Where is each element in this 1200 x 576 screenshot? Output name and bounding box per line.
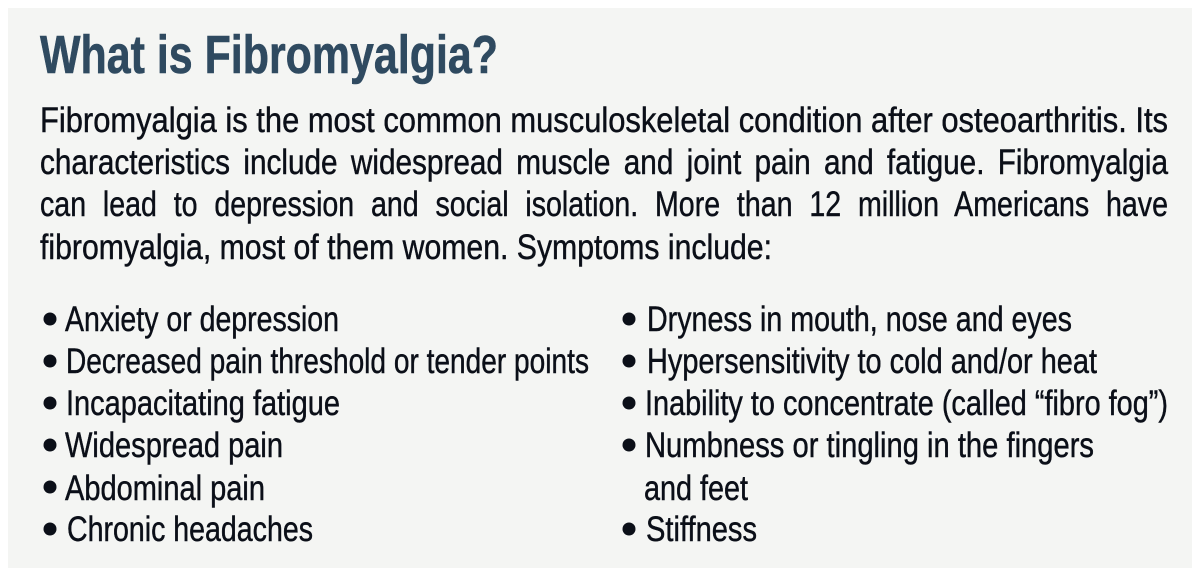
list: symptoms right column: Hypersensitivity to cold and/or heat	[647, 341, 1097, 381]
list: symptoms left column: Anxiety or depression	[65, 299, 339, 339]
list: symptoms left column: Decreased pain threshold or tender points	[66, 341, 589, 381]
text block: introduction paragraph: fibromyalgia, most of them women. Symptoms include:	[40, 227, 772, 267]
text block: introduction paragraph	[40, 100, 1168, 267]
list: symptoms left column: Abdominal pain	[65, 468, 265, 508]
list: symptoms left column: Incapacitating fatigue	[66, 383, 340, 423]
title: What is Fibromyalgia?	[40, 25, 498, 85]
list: symptoms right column: Numbness or tingling in the fingers	[645, 425, 1094, 465]
list: symptoms right column	[622, 299, 1168, 549]
list: symptoms left column: Chronic headaches	[67, 509, 313, 549]
list: symptoms left column	[44, 299, 589, 549]
list: symptoms right column: and feet	[644, 468, 748, 508]
list: symptoms right column: Stiffness	[646, 509, 757, 549]
list: symptoms right column: Dryness in mouth, nose and eyes	[647, 299, 1072, 339]
list: symptoms left column: Widespread pain	[65, 425, 283, 465]
